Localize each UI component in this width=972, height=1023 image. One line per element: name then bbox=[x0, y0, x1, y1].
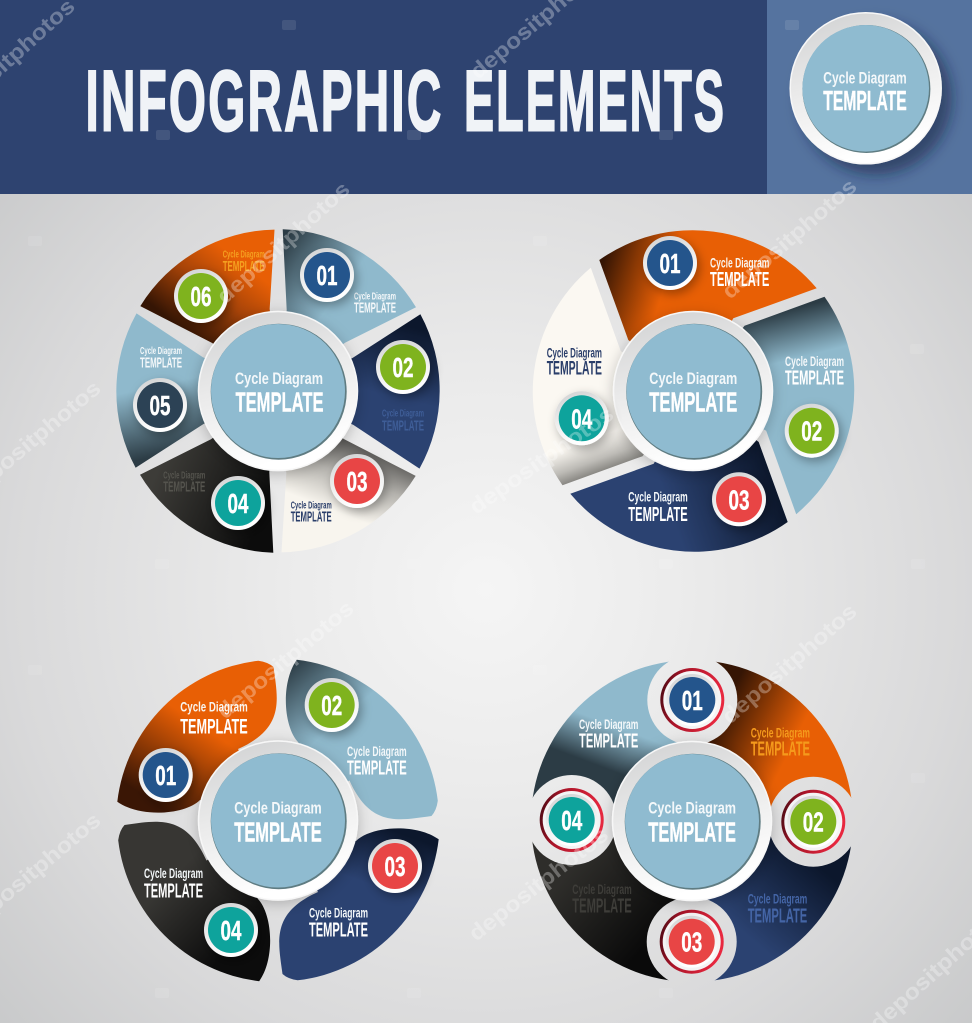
badge 04 bbox=[555, 391, 609, 445]
badge 03 bbox=[712, 472, 766, 526]
center circle: Cycle Diagram bbox=[234, 798, 322, 817]
watermarks: depositphotos bbox=[717, 598, 862, 729]
petal 01: Cycle Diagram bbox=[180, 700, 248, 715]
center circle bbox=[198, 741, 358, 900]
segment 02 bbox=[694, 297, 854, 514]
segment 01: TEMPLATE bbox=[710, 269, 769, 291]
watermarks: depositphotos bbox=[212, 176, 355, 309]
segment 01: Cycle Diagram bbox=[354, 290, 396, 302]
segment 06: TEMPLATE bbox=[223, 258, 265, 275]
segment 03: Cycle Diagram bbox=[628, 490, 688, 505]
petal 02: TEMPLATE bbox=[347, 758, 407, 780]
segment 04 bbox=[533, 268, 694, 485]
title: ELEMENTS bbox=[464, 54, 726, 150]
watermarks: depositphotos bbox=[717, 173, 862, 304]
petal 04: TEMPLATE bbox=[144, 880, 203, 902]
segment 01: TEMPLATE bbox=[354, 300, 396, 317]
header badge: TEMPLATE bbox=[823, 85, 907, 116]
petal 01: TEMPLATE bbox=[180, 715, 248, 738]
title: INFOGRAPHIC bbox=[86, 54, 444, 150]
badge 04 with red ring: 04 bbox=[561, 805, 582, 836]
badge 03 bbox=[330, 454, 384, 508]
watermarks: depositphotos bbox=[212, 595, 358, 724]
badge 03 with red ring: 03 bbox=[681, 927, 702, 958]
petal 04 bbox=[118, 820, 278, 981]
badge 04 bbox=[211, 476, 265, 530]
badge 05 bbox=[133, 378, 187, 432]
quadrant bottom right bbox=[692, 821, 853, 982]
label top right: Cycle Diagram bbox=[751, 725, 810, 740]
segment 04: TEMPLATE bbox=[163, 479, 205, 496]
header badge: Cycle Diagram bbox=[823, 68, 907, 87]
badge 05: 05 bbox=[150, 390, 170, 421]
segment 03: TEMPLATE bbox=[628, 504, 688, 526]
petal 02 bbox=[278, 660, 438, 820]
badge 01: 01 bbox=[660, 248, 680, 279]
center circle: TEMPLATE bbox=[649, 387, 737, 418]
badge 06 bbox=[174, 269, 228, 323]
badge 01 with red ring bbox=[647, 655, 737, 745]
badge 04 with red ring bbox=[527, 775, 617, 865]
petal 04: Cycle Diagram bbox=[144, 866, 203, 881]
petal 03 bbox=[278, 820, 439, 980]
center circle: TEMPLATE bbox=[236, 387, 324, 418]
label bottom right bbox=[748, 891, 807, 927]
segment 05: TEMPLATE bbox=[140, 355, 182, 372]
badge 02: 02 bbox=[321, 690, 342, 721]
segment 06: Cycle Diagram bbox=[223, 248, 265, 260]
segment 01 bbox=[278, 229, 416, 391]
center circle bbox=[614, 312, 772, 470]
badge 04: 04 bbox=[571, 403, 592, 434]
badge 02 bbox=[305, 678, 359, 732]
segment 04 bbox=[140, 391, 278, 553]
segment 04: TEMPLATE bbox=[547, 359, 602, 380]
watermarks: depositphotos bbox=[465, 401, 618, 519]
petal 01 bbox=[117, 661, 278, 820]
header banner bbox=[0, 0, 972, 194]
segment 01: Cycle Diagram bbox=[710, 255, 769, 270]
watermarks: depositphotos bbox=[464, 822, 613, 946]
panel: four-petal diagram bbox=[117, 660, 439, 981]
badge 01 with red ring: 01 bbox=[682, 685, 703, 716]
badge 01 bbox=[139, 748, 193, 802]
panel: four-quadrant diagram with disc cutouts bbox=[527, 655, 858, 987]
label top left bbox=[579, 717, 638, 752]
badge 02 with red ring: 02 bbox=[803, 807, 824, 838]
quadrant top left bbox=[531, 660, 692, 821]
segment 01 bbox=[599, 230, 817, 391]
badge 03: 03 bbox=[346, 466, 368, 497]
center circle bbox=[198, 312, 358, 470]
badge 03: 03 bbox=[728, 484, 750, 515]
petal 03: TEMPLATE bbox=[309, 920, 368, 942]
segment 02: TEMPLATE bbox=[785, 368, 844, 390]
badge 03 bbox=[368, 839, 422, 893]
badge 01 bbox=[300, 248, 354, 302]
quadrant bottom left bbox=[531, 821, 692, 982]
segment 02: TEMPLATE bbox=[382, 418, 424, 435]
segment 03 bbox=[209, 391, 418, 591]
segment 04: Cycle Diagram bbox=[547, 345, 602, 360]
label bottom left: TEMPLATE bbox=[572, 895, 632, 917]
label bottom left: Cycle Diagram bbox=[572, 882, 632, 897]
quadrant top right bbox=[692, 660, 853, 821]
center circle: Cycle Diagram bbox=[649, 369, 737, 388]
badge 01: 01 bbox=[155, 760, 176, 791]
segment 03 bbox=[570, 391, 788, 552]
segment 03: TEMPLATE bbox=[291, 509, 332, 526]
center circle: TEMPLATE bbox=[234, 817, 322, 848]
badge 02 bbox=[785, 404, 839, 458]
center circle: TEMPLATE bbox=[648, 817, 736, 848]
segment 02: Cycle Diagram bbox=[785, 354, 844, 369]
label bottom left bbox=[572, 882, 632, 917]
center circle: Cycle Diagram bbox=[648, 798, 736, 817]
segment 03: Cycle Diagram bbox=[291, 500, 332, 512]
label top left: Cycle Diagram bbox=[579, 717, 638, 732]
label bottom right: Cycle Diagram bbox=[748, 891, 807, 906]
panel: six-part cycle diagram bbox=[69, 191, 487, 591]
segment 05 bbox=[69, 271, 278, 472]
segment 02: Cycle Diagram bbox=[382, 408, 424, 420]
label top right bbox=[751, 725, 810, 761]
petal 02: Cycle Diagram bbox=[347, 744, 407, 759]
badge 04: 04 bbox=[220, 915, 242, 946]
header badge bbox=[790, 13, 941, 164]
segment 06 bbox=[138, 191, 347, 391]
badge 02 bbox=[376, 340, 430, 394]
badge 02: 02 bbox=[392, 352, 414, 383]
center circle bbox=[612, 742, 772, 900]
badge 04 bbox=[204, 903, 258, 957]
badge 01 bbox=[643, 236, 697, 290]
badge 06: 06 bbox=[190, 281, 212, 312]
segment 02 bbox=[278, 310, 487, 511]
badge 02: 02 bbox=[801, 416, 822, 447]
label top left: TEMPLATE bbox=[579, 730, 638, 752]
badge 02 with red ring bbox=[768, 777, 858, 867]
center circle: Cycle Diagram bbox=[235, 369, 323, 388]
panel: four-part sector diagram bbox=[533, 230, 854, 552]
segment 04: Cycle Diagram bbox=[163, 469, 205, 481]
badge 04: 04 bbox=[228, 488, 249, 519]
label bottom right: TEMPLATE bbox=[748, 905, 807, 927]
segment 05: Cycle Diagram bbox=[140, 345, 182, 357]
badge 03 with red ring bbox=[647, 897, 737, 987]
badge 03: 03 bbox=[384, 851, 406, 882]
petal 03: Cycle Diagram bbox=[309, 905, 368, 920]
label top right: TEMPLATE bbox=[751, 739, 810, 761]
badge 01: 01 bbox=[316, 260, 338, 291]
